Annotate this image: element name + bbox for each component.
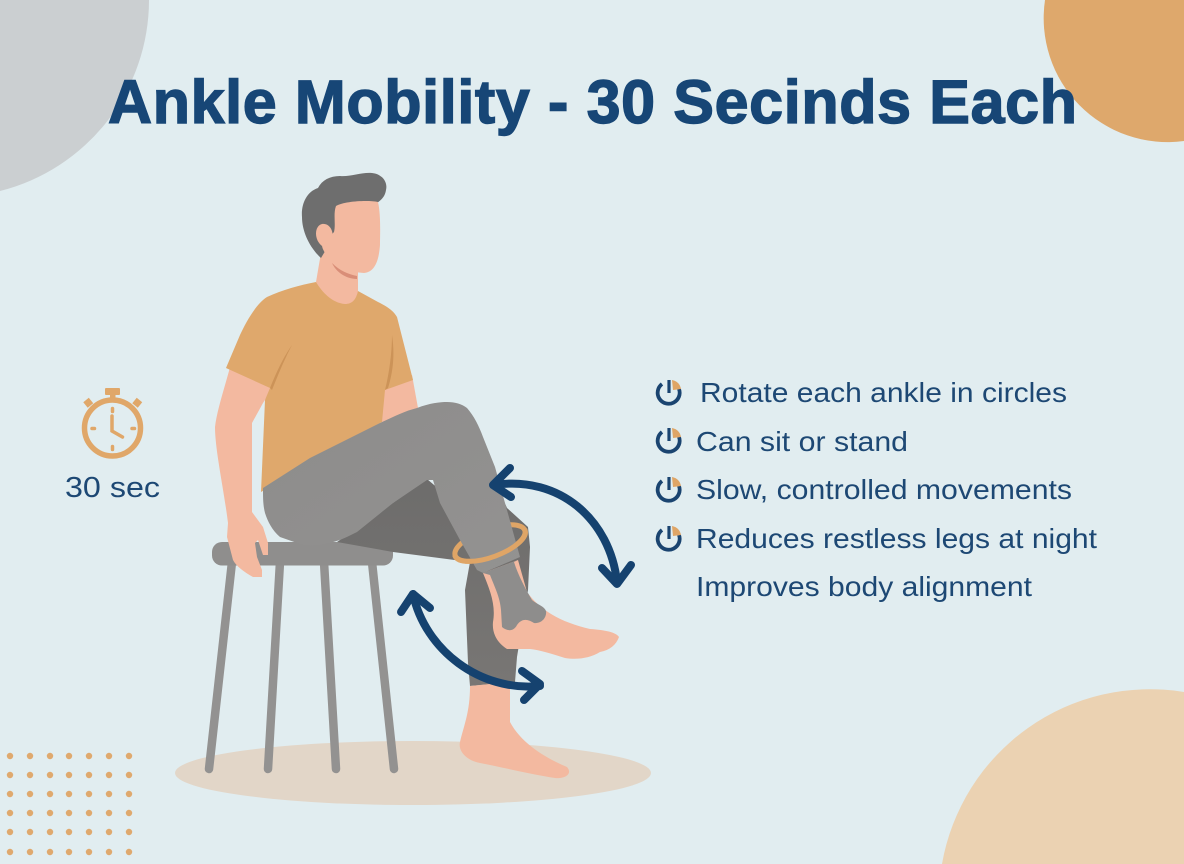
- ankle ring back: [450, 517, 530, 569]
- stopwatch label: 30 sec: [65, 472, 160, 504]
- bullet list: [658, 377, 1097, 602]
- hair: [302, 173, 386, 258]
- person on stool: [209, 173, 619, 778]
- back leg: [337, 470, 530, 686]
- motion arrow: lower: [401, 594, 540, 700]
- list line 5: Improves body alignment: [696, 571, 1032, 602]
- shirt fold lines: [270, 335, 393, 390]
- near arm and hand: [215, 360, 278, 577]
- neck: [316, 247, 358, 312]
- bullet 2: Can sit or stand: [696, 426, 908, 457]
- head: [322, 201, 380, 273]
- ear: [316, 224, 333, 246]
- sock: [483, 560, 546, 630]
- stopwatch icon: [84, 388, 140, 456]
- title: Ankle Mobility - 30 Secinds Each: [108, 68, 1077, 136]
- motion arrow: upper: [493, 468, 631, 584]
- ankle ring front: [455, 530, 525, 561]
- shirt: [226, 282, 413, 492]
- floor shadow: [175, 741, 651, 805]
- lower foot: [460, 682, 569, 778]
- bullet 4: Reduces restless legs at night: [696, 523, 1097, 554]
- decorative circle: top right: [1044, 0, 1184, 142]
- far arm: [380, 375, 418, 426]
- dot pattern: [7, 753, 132, 855]
- raised foot: [483, 560, 619, 659]
- neck shadow: [332, 263, 357, 279]
- decorative circle: bottom right: [942, 689, 1184, 864]
- stool: [209, 542, 394, 769]
- upper leg and shin: [263, 402, 520, 573]
- bullet 1: Rotate each ankle in circles: [700, 377, 1067, 408]
- decorative circle: top left: [0, 0, 149, 191]
- bullet 3: Slow, controlled movements: [696, 474, 1072, 505]
